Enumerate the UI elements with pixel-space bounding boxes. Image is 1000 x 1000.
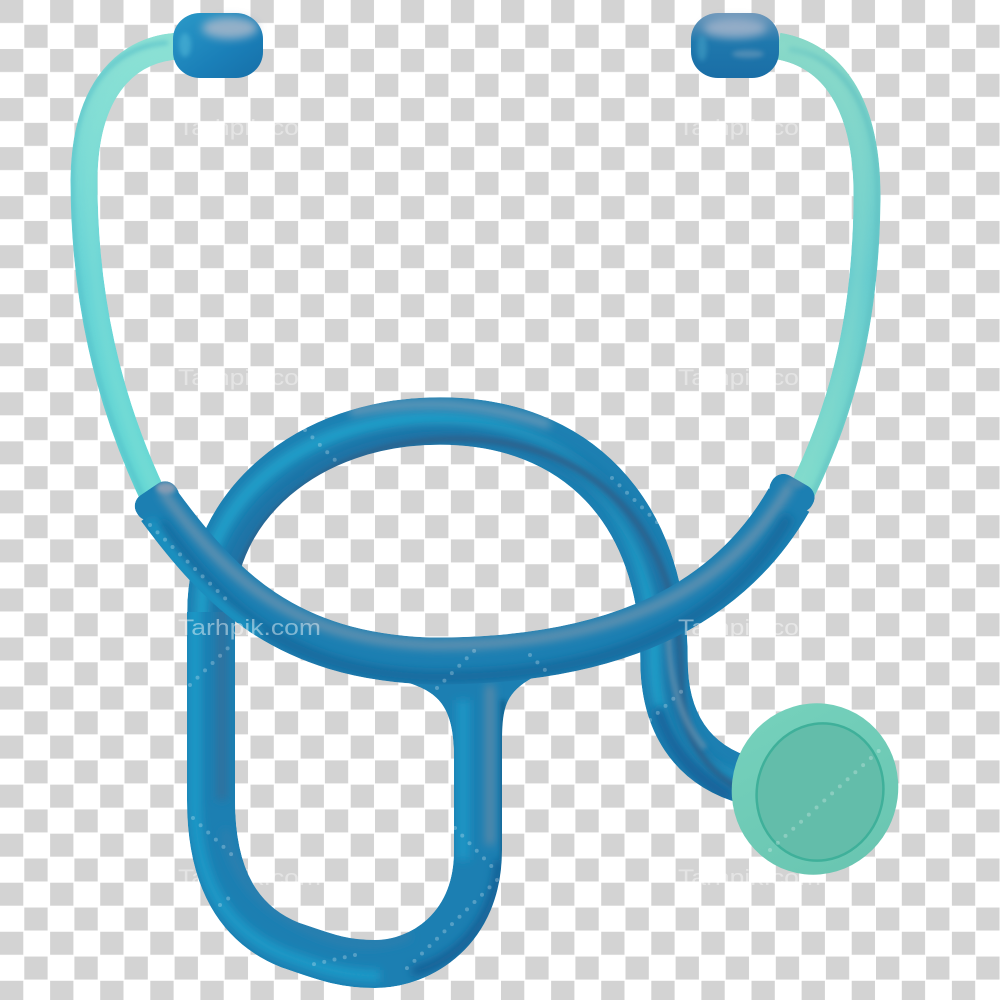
watermark: Tarhpik.com over tubes, row three: Tarhpik.com [178, 615, 321, 640]
chest tube: ring and arc to chestpiece [202, 404, 765, 799]
watermark: dotted lattice lines on the tubes [150, 430, 883, 975]
watermark: Tarhpik.com over tubes, row three: Tarhpik.com [678, 615, 821, 640]
watermark: Tarhpik.com on background: Tarhpik.com [678, 865, 821, 890]
watermark: Tarhpik.com on background: Tarhpik.com [178, 365, 321, 390]
watermark: Tarhpik.com on background [178, 115, 821, 890]
watermark: Tarhpik.com over tubes, row three [178, 615, 821, 640]
watermark: Tarhpik.com on background: Tarhpik.com [178, 865, 321, 890]
chestpiece diaphragm [709, 682, 921, 896]
watermark: Tarhpik.com on background: Tarhpik.com [178, 115, 321, 140]
watermark: Tarhpik.com on background: Tarhpik.com [678, 365, 821, 390]
left ear tube [72, 43, 186, 512]
left ear tip [173, 13, 263, 78]
watermark: Tarhpik.com on background: Tarhpik.com [678, 115, 821, 140]
right ear tip [691, 13, 779, 78]
chestpiece rim [709, 682, 921, 896]
chestpiece inner ring [741, 709, 899, 875]
lower U tube and stem [195, 590, 532, 976]
Y-shaped binaural yoke [130, 469, 819, 677]
right ear tube [773, 44, 878, 508]
